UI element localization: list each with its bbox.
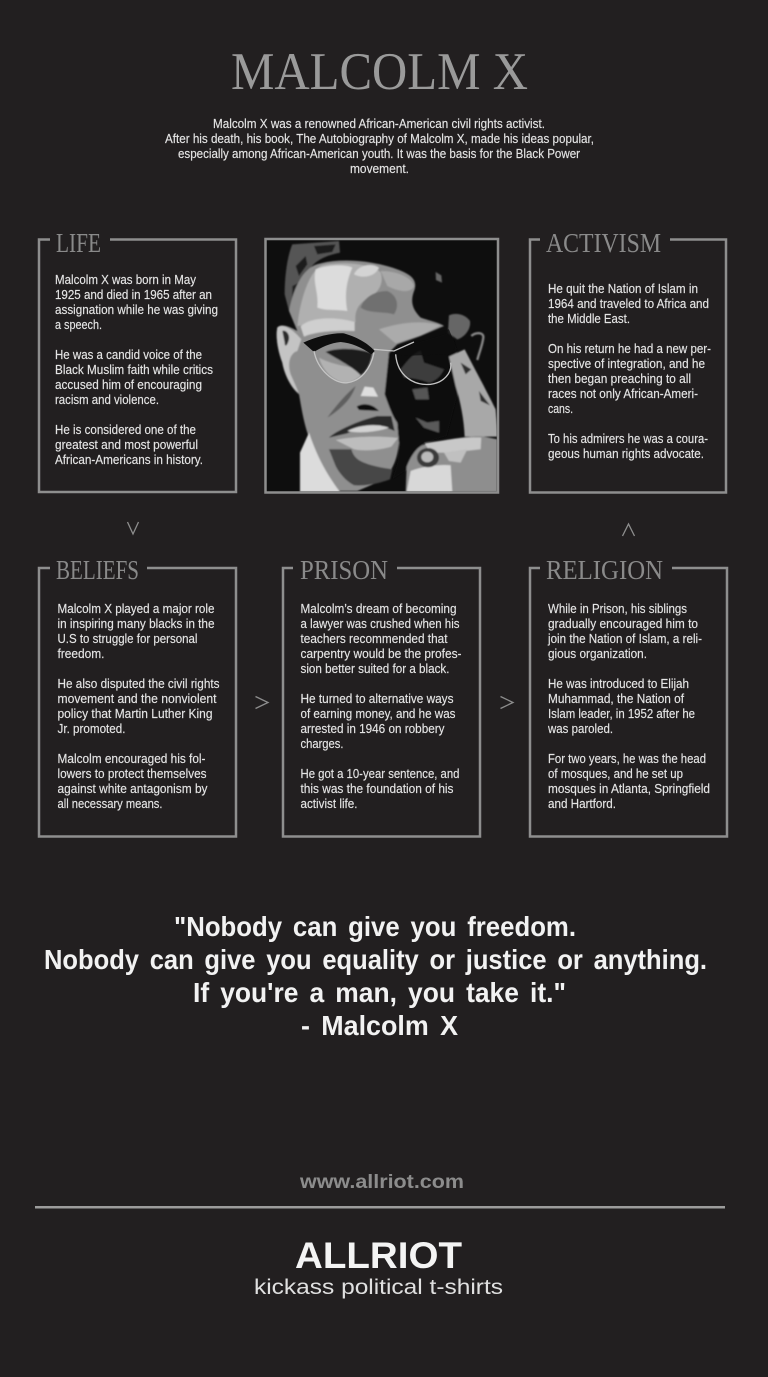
text: prison: of earning money, and he was xyxy=(300,707,456,721)
text: religion: mosques in Atlanta, Springfield xyxy=(548,782,710,796)
text: activism: To his admirers he was a coura- xyxy=(548,432,708,446)
heading: life: LIFE xyxy=(56,228,101,258)
text: religion xyxy=(547,602,710,811)
heading: religion: RELIGION xyxy=(546,555,663,585)
text: prison: teachers recommended that xyxy=(300,632,448,646)
panel: prison xyxy=(283,555,480,836)
text: prison: activist life. xyxy=(300,797,358,811)
text: life: He was a candid voice of the xyxy=(55,348,202,362)
text: beliefs: all necessary means. xyxy=(58,797,162,811)
text: activism: geous human rights advocate. xyxy=(548,447,704,461)
text: activism: On his return he had a new per- xyxy=(548,342,711,356)
text: beliefs: against white antagonism by xyxy=(58,782,208,796)
text: prison: charges. xyxy=(300,737,344,751)
text: life xyxy=(55,273,218,467)
text: activism: cans. xyxy=(548,402,573,416)
text: life: 1925 and died in 1965 after an xyxy=(55,288,212,302)
text: prison: a lawyer was crushed when his xyxy=(300,617,460,631)
text: beliefs: He also disputed the civil rights xyxy=(58,677,220,691)
text: life: African-Americans in history. xyxy=(55,453,203,467)
text: activism: the Middle East. xyxy=(548,312,630,326)
text: activism: 1964 and traveled to Africa and xyxy=(548,297,709,311)
text: life: accused him of encouraging xyxy=(55,378,202,392)
text: religion: gradually encouraged him to xyxy=(548,617,698,631)
panel: beliefs xyxy=(39,555,236,836)
text: prison: He got a 10-year sentence, and xyxy=(300,767,460,781)
intro text: After his death, his book, The Autobiography of Malcolm X, made his ideas popular, xyxy=(165,132,594,146)
text: religion: of mosques, and he set up xyxy=(548,767,683,781)
text: religion: For two years, he was the head xyxy=(548,752,706,766)
text: beliefs: Malcolm X played a major role xyxy=(58,602,215,616)
text: prison: carpentry would be the profes- xyxy=(300,647,462,661)
text: prison xyxy=(300,602,462,811)
brand tagline: kickass political t-shirts xyxy=(254,1276,503,1299)
text: religion: was paroled. xyxy=(547,722,613,736)
brand name: ALLRIOT xyxy=(295,1235,462,1276)
heading: beliefs: BELIEFS xyxy=(56,555,139,585)
quote: - Malcolm X xyxy=(301,1010,458,1041)
text: prison: He turned to alternative ways xyxy=(300,692,454,706)
quote: If you're a man, you take it." xyxy=(193,977,566,1008)
text: religion: join the Nation of Islam, a reli- xyxy=(547,632,702,646)
title: MALCOLM X xyxy=(231,43,528,101)
text: beliefs: movement and the nonviolent xyxy=(58,692,217,706)
intro text: especially among African-American youth. It was the basis for the Black Power xyxy=(178,147,580,161)
quote xyxy=(44,911,707,1041)
text: life: a speech. xyxy=(55,318,102,332)
text: life: assignation while he was giving xyxy=(55,303,218,317)
arrow: prison to religion xyxy=(500,696,513,708)
text: prison: this was the foundation of his xyxy=(300,782,454,796)
quote: "Nobody can give you freedom. xyxy=(174,911,576,942)
text: activism: then began preaching to all xyxy=(548,372,691,386)
intro text xyxy=(165,117,594,176)
text: beliefs: policy that Martin Luther King xyxy=(58,707,213,721)
footer rule xyxy=(35,1206,725,1208)
text: beliefs xyxy=(58,602,220,811)
arrow: life down to beliefs xyxy=(128,522,138,534)
text: life: racism and violence. xyxy=(55,393,159,407)
website url: www.allriot.com xyxy=(299,1172,464,1193)
quote: Nobody can give you equality or justice or anything. xyxy=(44,944,707,975)
text: beliefs: freedom. xyxy=(58,647,104,661)
text: beliefs: U.S to struggle for personal xyxy=(58,632,198,646)
panel: life xyxy=(39,228,236,492)
text: activism: spective of integration, and he xyxy=(548,357,705,371)
text: life: Malcolm X was born in May xyxy=(55,273,197,287)
text: life: greatest and most powerful xyxy=(55,438,198,452)
text: beliefs: lowers to protect themselves xyxy=(58,767,206,781)
panel: religion xyxy=(530,555,727,836)
text: beliefs: Jr. promoted. xyxy=(58,722,126,736)
heading: prison: PRISON xyxy=(300,555,388,585)
text: life: Black Muslim faith while critics xyxy=(55,363,213,377)
text: beliefs: Malcolm encouraged his fol- xyxy=(58,752,206,766)
text: religion: While in Prison, his siblings xyxy=(548,602,687,616)
intro text: Malcolm X was a renowned African-American civil rights activist. xyxy=(213,117,545,131)
text: activism xyxy=(548,282,711,461)
portrait of Malcolm X xyxy=(266,239,498,492)
text: religion: He was introduced to Elijah xyxy=(548,677,689,691)
text: prison: Malcolm’s dream of becoming xyxy=(300,602,457,616)
text: religion: and Hartford. xyxy=(548,797,616,811)
intro text: movement. xyxy=(350,162,409,176)
text: prison: arrested in 1946 on robbery xyxy=(300,722,445,736)
arrow: beliefs to prison xyxy=(256,696,268,708)
heading: activism: ACTIVISM xyxy=(546,228,661,258)
arrow: religion up to activism xyxy=(622,524,634,536)
text: activism: races not only African-Ameri- xyxy=(548,387,698,401)
text: beliefs: in inspiring many blacks in the xyxy=(58,617,215,631)
text: prison: sion better suited for a black. xyxy=(300,662,450,676)
panel: activism xyxy=(530,228,726,492)
text: religion: Islam leader, in 1952 after he xyxy=(548,707,695,721)
text: religion: gious organization. xyxy=(548,647,647,661)
text: religion: Muhammad, the Nation of xyxy=(548,692,684,706)
text: activism: He quit the Nation of Islam in xyxy=(548,282,698,296)
text: life: He is considered one of the xyxy=(55,423,196,437)
